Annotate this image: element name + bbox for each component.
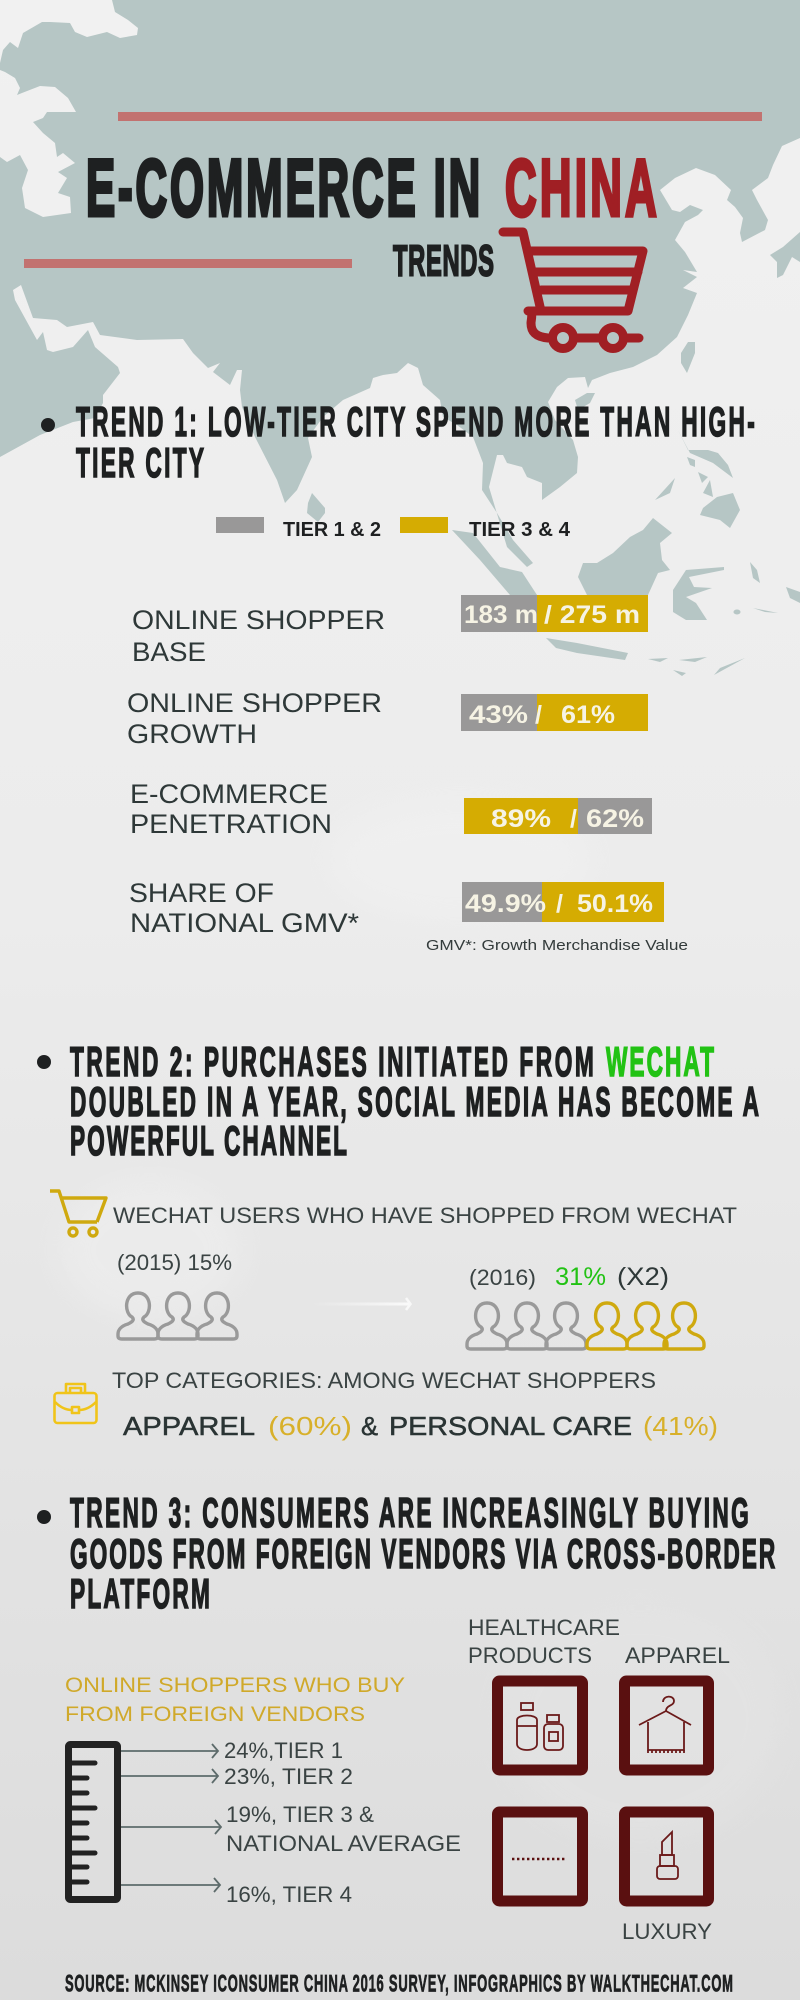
row: e-commerce penetration: E-COMMERCE — [130, 779, 328, 809]
subtitle: TRENDS — [393, 237, 494, 285]
heading: trend 3: GOODS FROM FOREIGN VENDORS VIA CROSS-BORDER — [70, 1531, 775, 1578]
icon: ruler — [68, 1744, 118, 1900]
category labels: APPAREL — [625, 1643, 730, 1668]
heading: trend 3: PLATFORM — [70, 1571, 210, 1618]
text: apparel and personal care: APPAREL — [123, 1411, 255, 1441]
heading: trend 1: TREND 1: LOW-TIER CITY SPEND MORE THAN HIGH- — [76, 399, 755, 446]
arrows from ruler — [121, 1744, 221, 1892]
stat: 2016: 31% — [555, 1263, 606, 1291]
label: luxury: LUXURY — [622, 1919, 712, 1944]
category labels — [468, 1615, 730, 1668]
row: e-commerce penetration: / — [570, 805, 577, 833]
row: share of national gmv: / — [556, 890, 563, 918]
icon: briefcase — [54, 1384, 96, 1423]
legend: TIER 3 & 4 — [469, 519, 571, 541]
category labels: PRODUCTS — [468, 1643, 592, 1668]
icon tile: apparel — [624, 1681, 708, 1770]
decorative red bar left — [24, 259, 352, 268]
row: online shopper growth — [127, 688, 648, 749]
row: online shopper growth: 43% — [469, 701, 528, 729]
category labels: HEALTHCARE — [468, 1615, 620, 1640]
tier percentages: 16%, TIER 4 — [226, 1882, 352, 1907]
stat: 2015: (2015) 15% — [117, 1250, 232, 1275]
row: e-commerce penetration: 89% — [491, 805, 551, 833]
icon: shopping cart red — [503, 232, 643, 348]
row: share of national gmv — [129, 878, 664, 938]
tier percentages: NATIONAL AVERAGE — [226, 1831, 461, 1856]
decorative red bar top — [118, 112, 762, 121]
text: apparel and personal care: & — [361, 1411, 378, 1441]
stat: 2016 — [469, 1263, 669, 1291]
tier percentages: 19%, TIER 3 & — [226, 1802, 374, 1827]
row: share of national gmv: 50.1% — [577, 890, 653, 918]
row: online shopper growth: GROWTH — [127, 719, 257, 749]
icon: shopping cart yellow — [50, 1191, 106, 1236]
title: E-COMMERCE IN — [86, 142, 480, 233]
heading: trend 2: DOUBLED IN A YEAR, SOCIAL MEDIA HAS BECOME A — [70, 1079, 759, 1126]
footnote: GMV*: Growth Merchandise Value — [426, 937, 688, 954]
heading: trend 1 — [41, 399, 755, 487]
row: online shopper base: 183 m — [464, 601, 538, 629]
people 2016 — [467, 1303, 704, 1349]
heading: trend 2: WECHAT — [606, 1039, 714, 1086]
legend — [216, 517, 571, 541]
text: apparel and personal care: (41%) — [643, 1411, 718, 1441]
icon tile: more categories — [498, 1812, 582, 1901]
text: online shoppers who buy — [65, 1674, 405, 1726]
source line: SOURCE: MCKINSEY ICONSUMER CHINA 2016 SURVEY, INFOGRAPHICS BY WALKTHECHAT.COM — [65, 1972, 733, 1998]
text: top categories: TOP CATEGORIES: AMONG WECHAT SHOPPERS — [112, 1368, 656, 1393]
heading: trend 3: TREND 3: CONSUMERS ARE INCREASINGLY BUYING — [70, 1490, 749, 1537]
row: online shopper base: ONLINE SHOPPER — [132, 605, 385, 635]
text: apparel and personal care: (60%) — [268, 1411, 352, 1441]
text: wechat users: WECHAT USERS WHO HAVE SHOPPED FROM WECHAT — [113, 1203, 737, 1228]
icon tile: luxury lipstick — [624, 1812, 708, 1901]
people 2015 — [118, 1293, 237, 1339]
text: online shoppers who buy: FROM FOREIGN VENDORS — [65, 1703, 365, 1726]
text: apparel and personal care: PERSONAL CARE — [389, 1411, 632, 1441]
legend: TIER 1 & 2 — [283, 519, 381, 541]
stat: 2016: (2016) — [469, 1265, 536, 1290]
heading: trend 2: TREND 2: PURCHASES INITIATED FROM — [70, 1039, 594, 1086]
row: share of national gmv: SHARE OF — [129, 878, 274, 908]
row: online shopper growth: ONLINE SHOPPER — [127, 688, 382, 718]
row: online shopper growth: 61% — [561, 701, 615, 729]
heading: trend 2 — [37, 1039, 759, 1165]
heading: trend 3 — [37, 1490, 775, 1618]
icon tile: healthcare — [498, 1681, 582, 1770]
row: online shopper base: / 275 m — [544, 601, 640, 629]
row: share of national gmv: 49.9% — [465, 890, 546, 918]
arrow — [311, 1298, 410, 1310]
row: e-commerce penetration: 62% — [586, 805, 644, 833]
heading: trend 2: POWERFUL CHANNEL — [70, 1118, 347, 1165]
map of Asia — [0, 0, 800, 676]
tier percentages: 24%,TIER 1 — [224, 1738, 343, 1763]
title — [86, 142, 657, 233]
tier percentages — [224, 1738, 461, 1907]
tier percentages: 23%, TIER 2 — [224, 1764, 353, 1789]
row: share of national gmv: NATIONAL GMV* — [130, 908, 360, 938]
stat: 2016: (X2) — [617, 1263, 669, 1291]
row: online shopper base: BASE — [132, 637, 206, 667]
row: e-commerce penetration — [130, 779, 652, 839]
heading: trend 1: TIER CITY — [76, 440, 204, 487]
row: e-commerce penetration: PENETRATION — [130, 809, 332, 839]
row: online shopper base — [132, 595, 648, 667]
text: apparel and personal care — [123, 1411, 718, 1441]
title: CHINA — [505, 142, 657, 233]
row: online shopper growth: / — [535, 701, 542, 729]
text: online shoppers who buy: ONLINE SHOPPERS WHO BUY — [65, 1674, 405, 1697]
